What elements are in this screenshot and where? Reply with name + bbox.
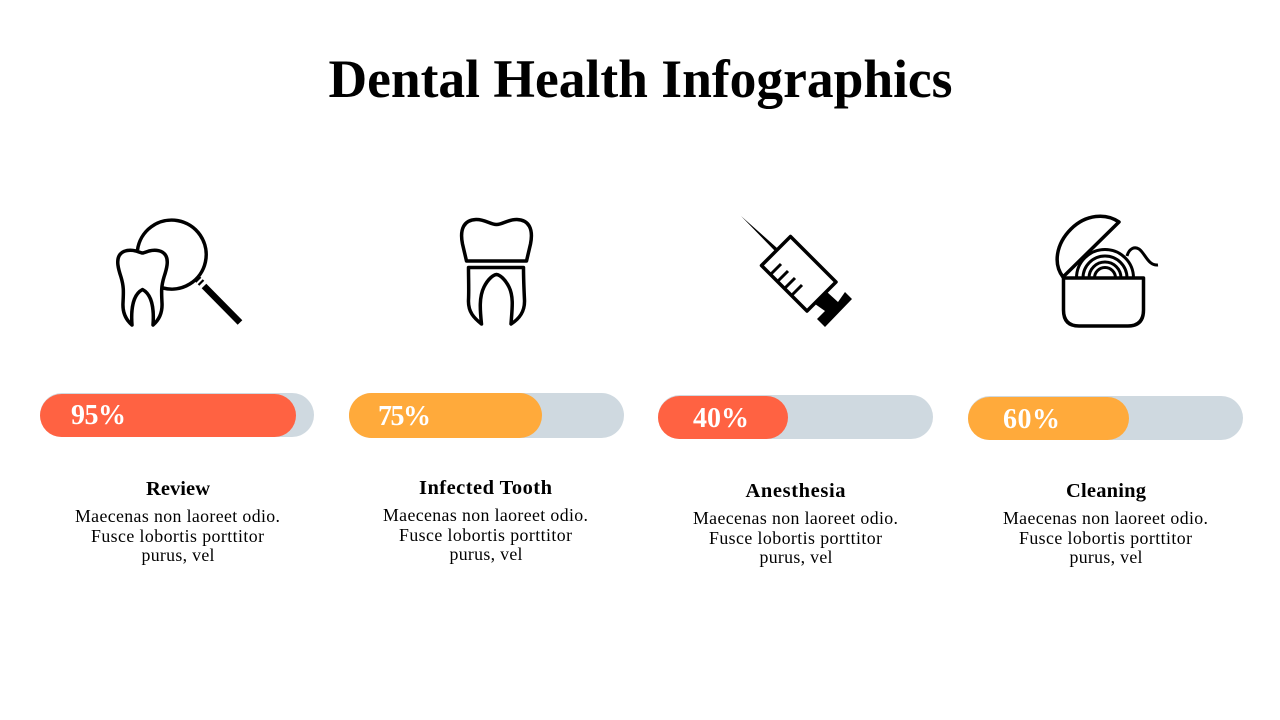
progress bar: 60%: 60% <box>1003 404 1060 435</box>
description: anesthesia <box>693 508 898 567</box>
panel: review <box>40 220 314 565</box>
heading: cleaning: Cleaning <box>1066 480 1147 502</box>
icon: syringe <box>741 216 852 327</box>
description: review <box>75 506 280 565</box>
description: anesthesia: purus, vel <box>760 547 833 567</box>
description: cleaning: Maecenas non laoreet odio. <box>1003 508 1208 528</box>
description: cleaning: purus, vel <box>1070 547 1143 567</box>
progress bar: 95%: 95% <box>71 400 126 431</box>
panel: anesthesia <box>658 216 933 567</box>
description: cleaning: Fusce lobortis porttitor <box>1019 528 1192 548</box>
title: Dental Health Infographics <box>328 49 952 109</box>
progress bar: 60% <box>968 396 1243 440</box>
description: review: Maecenas non laoreet odio. <box>75 506 280 526</box>
progress bar: 40%: 40% <box>693 403 749 434</box>
progress bar: 40% <box>658 395 933 439</box>
progress bar: 75% <box>349 393 624 438</box>
description: cleaning <box>1003 508 1208 567</box>
panel: infected tooth <box>349 219 624 564</box>
panel: cleaning <box>968 216 1243 567</box>
description: infected tooth <box>383 505 588 564</box>
icon: tooth with crown <box>462 219 531 324</box>
icon: dental floss box <box>1057 216 1158 326</box>
description: review: purus, vel <box>142 545 215 565</box>
progress bar: 75%: 75% <box>378 401 431 432</box>
description: infected tooth: Maecenas non laoreet odio. <box>383 505 588 525</box>
description: infected tooth: Fusce lobortis porttitor <box>399 525 572 545</box>
description: review: Fusce lobortis porttitor <box>91 526 264 546</box>
heading: anesthesia: Anesthesia <box>746 480 846 502</box>
heading: review: Review <box>146 478 210 500</box>
description: anesthesia: Fusce lobortis porttitor <box>709 528 882 548</box>
progress bar: 95% <box>40 393 314 437</box>
icon: tooth with magnifying glass <box>118 220 240 325</box>
heading: infected tooth: Infected Tooth <box>419 477 553 499</box>
description: anesthesia: Maecenas non laoreet odio. <box>693 508 898 528</box>
description: infected tooth: purus, vel <box>450 544 523 564</box>
